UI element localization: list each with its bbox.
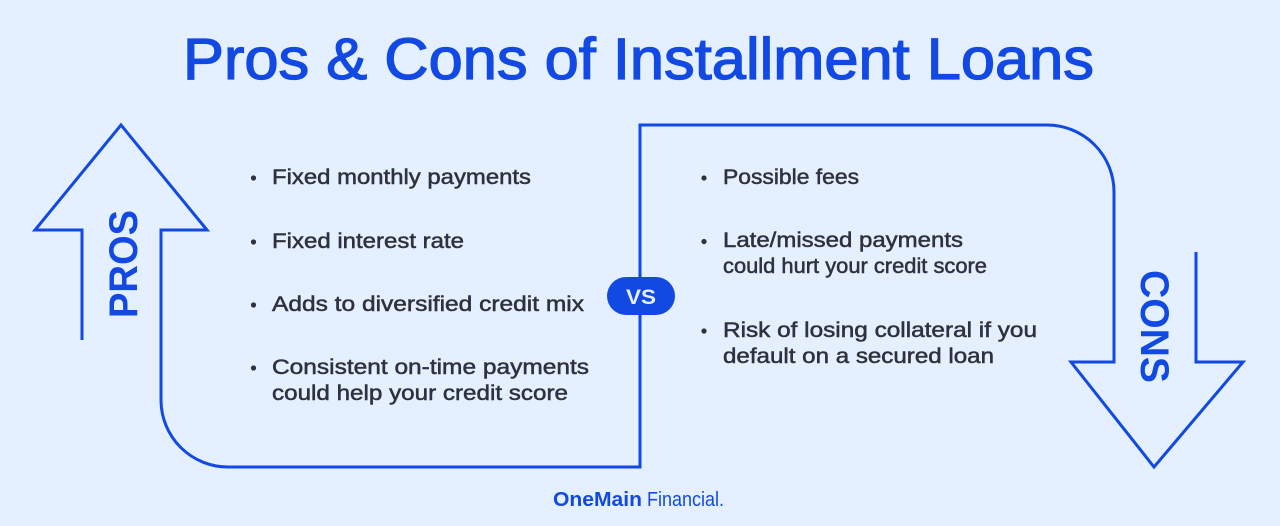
cons item: late or missed payments [701, 229, 987, 278]
vs badge: VS [626, 286, 656, 309]
pros item: on-time payments: could help your credit score [272, 382, 568, 405]
pros item: on-time payments [251, 356, 589, 405]
panel: cons list [701, 166, 1037, 368]
pros label: PROS [102, 210, 146, 318]
cons item: losing collateral: Risk of losing collateral if you [723, 319, 1037, 342]
cons item: late or missed payments: Late/missed payments [723, 229, 963, 252]
pros item: diversified credit mix: Adds to diversified credit mix [272, 293, 585, 316]
cons item: late or missed payments: could hurt your credit score [723, 255, 987, 278]
pros item: fixed interest rate: Fixed interest rate [272, 230, 464, 253]
cons label: CONS [1132, 270, 1176, 383]
cons item: losing collateral: default on a secured loan [723, 345, 994, 368]
arrow outline: pros arrow through vs divider to cons arrow [35, 125, 1243, 467]
pros item: on-time payments: Consistent on-time payments [272, 356, 589, 379]
panel: pros list [251, 166, 589, 405]
logo: OneMain Financial: Financial. [647, 489, 724, 511]
title: Pros & Cons of Installment Loans [183, 27, 1094, 92]
cons item: losing collateral [701, 319, 1037, 368]
logo: OneMain Financial [553, 489, 724, 511]
cons item: possible fees: Possible fees [723, 166, 859, 189]
vs badge [607, 277, 675, 315]
pros item: fixed monthly payments: Fixed monthly payments [272, 166, 531, 189]
logo: OneMain Financial: OneMain [553, 489, 642, 511]
